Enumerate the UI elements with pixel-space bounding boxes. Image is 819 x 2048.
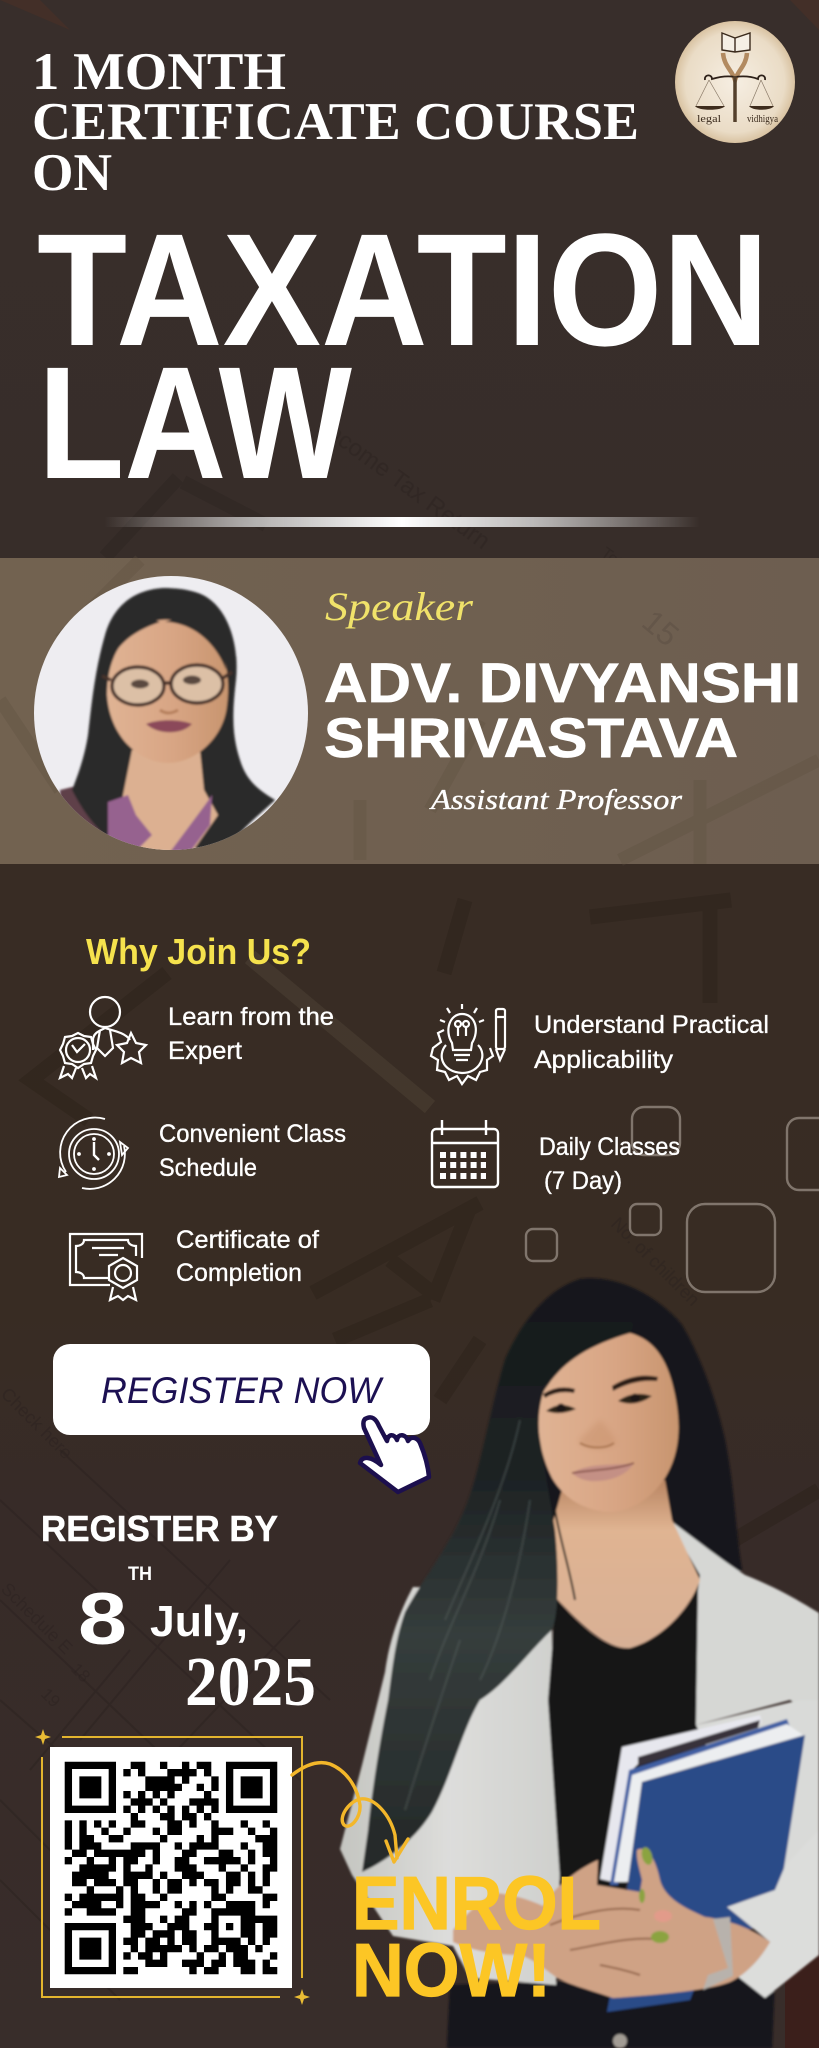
text <box>168 1003 334 1065</box>
icon: certificate <box>70 1234 142 1300</box>
student watch <box>703 1917 733 1990</box>
registration deadline: 8 <box>78 1579 127 1660</box>
benefit: certificate of completion <box>70 1226 319 1300</box>
text: (7 Day) <box>544 1167 622 1195</box>
student neck and chest <box>545 1480 700 1648</box>
student top <box>548 1585 698 1890</box>
panel: speaker: 15 <box>636 603 686 653</box>
student photo <box>340 1278 819 2048</box>
call to action: enrol now <box>352 1861 601 2012</box>
register now button <box>53 1344 430 1435</box>
registration deadline <box>41 1508 316 1721</box>
heading: 1 month certificate course on <box>32 43 639 202</box>
icon: clock <box>59 1118 128 1189</box>
text: Expert <box>168 1037 242 1065</box>
icon: bulb gear and pencil <box>431 1004 505 1084</box>
student jacket left <box>340 1587 560 1985</box>
logo: legal <box>697 114 721 125</box>
student sleeve <box>727 1830 819 1998</box>
main title: taxation law: LAW <box>38 333 352 512</box>
heading: 1 month certificate course on: 1 MONTH <box>32 43 286 101</box>
speaker photo <box>30 570 315 855</box>
call to action: enrol now: ENROL <box>352 1861 601 1945</box>
speaker name: SHRIVASTAVA <box>324 706 738 769</box>
background: Income Tax Return <box>316 415 495 555</box>
main title: taxation law: TAXATION <box>37 200 769 379</box>
panel: speaker <box>0 558 819 864</box>
text <box>159 1120 346 1182</box>
text: Learn from the <box>168 1003 334 1031</box>
registration deadline: REGISTER BY <box>41 1508 278 1549</box>
student book <box>600 1715 762 1882</box>
qr code with gold frame <box>35 1729 310 2005</box>
logo <box>675 21 795 143</box>
registration deadline: TH <box>128 1564 152 1585</box>
student hair front <box>362 1279 633 1872</box>
student jacket right <box>667 1518 819 1725</box>
text: Certificate of <box>176 1226 319 1254</box>
background: Total Income <box>598 544 681 612</box>
speaker name: ADV. DIVYANSHI <box>324 651 801 714</box>
icon: hand cursor <box>360 1417 429 1492</box>
heading: 1 month certificate course on: CERTIFICATE COURSE <box>32 93 639 151</box>
registration deadline: 2025 <box>185 1644 316 1721</box>
text: Applicability <box>534 1046 674 1074</box>
text <box>539 1133 680 1195</box>
student face <box>539 1333 679 1512</box>
logo: vidhigya <box>747 114 778 125</box>
student hair back <box>520 1278 742 1600</box>
heading: why join us: Why Join Us? <box>86 931 311 972</box>
text <box>176 1226 319 1287</box>
main title: taxation law <box>37 200 769 512</box>
speaker name <box>324 651 801 769</box>
benefit: daily classes <box>432 1120 680 1195</box>
student pants <box>447 1975 775 2048</box>
text: Completion <box>176 1259 302 1287</box>
speaker label: Speaker <box>325 584 473 629</box>
background: 18 <box>67 1659 94 1686</box>
arrow: qr to enrol <box>292 1763 408 1862</box>
call to action: enrol now: NOW! <box>352 1928 551 2012</box>
background: 19 <box>37 1684 64 1711</box>
text: Convenient Class <box>159 1120 346 1148</box>
text: Schedule <box>159 1154 257 1182</box>
text <box>534 1011 769 1074</box>
register now button: REGISTER NOW <box>101 1370 384 1411</box>
benefit: convenient class schedule <box>59 1118 346 1189</box>
icon: calendar <box>432 1120 498 1187</box>
gradient rule <box>104 517 700 527</box>
decorative rounded squares <box>526 1107 819 1292</box>
student hands <box>453 1849 770 1998</box>
benefit: learn from the expert <box>60 997 334 1078</box>
background: No. of children <box>607 1214 703 1310</box>
registration deadline: July, <box>150 1597 248 1646</box>
text: Daily Classes <box>539 1133 680 1161</box>
text: Understand Practical <box>534 1011 769 1039</box>
icon: expert award <box>60 997 146 1078</box>
speaker role: Assistant Professor <box>429 784 683 816</box>
benefit: understand practical applicability <box>431 1004 769 1084</box>
heading: 1 month certificate course on: ON <box>32 144 112 202</box>
